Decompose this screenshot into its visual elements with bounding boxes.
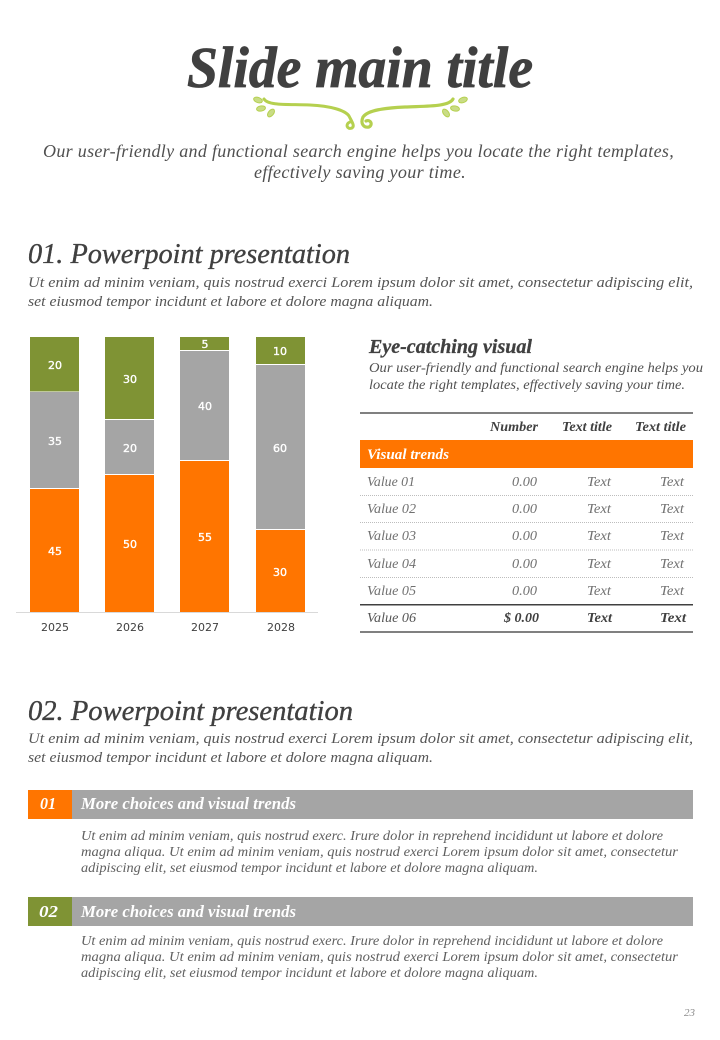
stacked bar chart bbox=[16, 337, 318, 634]
bar 2028 bbox=[256, 337, 305, 612]
section 02 paragraph: set eiusmod tempor incidunt et labore et dolore magna aliquam. bbox=[28, 750, 433, 766]
subtitle bbox=[43, 141, 674, 182]
row value 05: Value 05 bbox=[367, 584, 416, 599]
bar 2026: 50 bbox=[123, 538, 137, 551]
data table bbox=[360, 412, 693, 633]
bar 2028: 30 bbox=[273, 566, 287, 579]
row value 04 bbox=[367, 557, 685, 572]
item 01 header bar: 01 bbox=[40, 794, 56, 813]
row value 06 total bbox=[367, 611, 687, 626]
item 02 header bar: More choices and visual trends bbox=[80, 902, 296, 921]
row value 04: Text bbox=[587, 557, 612, 572]
item 02 header bar bbox=[28, 897, 693, 926]
row value 03: Text bbox=[587, 529, 612, 544]
item 01 text bbox=[81, 829, 679, 876]
bar 2028: 10 bbox=[273, 345, 287, 358]
table header row bbox=[489, 420, 686, 435]
bar 2025: 45 bbox=[48, 545, 62, 558]
axis labels: 2027 bbox=[191, 621, 219, 634]
section 01 paragraph: set eiusmod tempor incidunt et labore et dolore magna aliquam. bbox=[28, 294, 433, 310]
item 01 header bar bbox=[28, 790, 693, 819]
icon: green leaf flourish bbox=[253, 96, 468, 128]
section 02 paragraph bbox=[28, 731, 693, 766]
row value 01: Text bbox=[587, 475, 612, 490]
row value 06 total: Text bbox=[587, 611, 613, 626]
row value 01: 0.00 bbox=[512, 475, 537, 490]
item 01 text: Ut enim ad minim veniam, quis nostrud exerc. Irure dolor in reprehend incididunt ut labore et dolore bbox=[81, 829, 663, 844]
table heading: Eye-catching visual bbox=[368, 336, 532, 358]
row value 04: Text bbox=[660, 557, 685, 572]
row value 01: Value 01 bbox=[367, 475, 415, 490]
section 02 paragraph: Ut enim ad minim veniam, quis nostrud exerci Lorem ipsum dolor sit amet, consectetur adipiscing elit, bbox=[28, 731, 693, 747]
axis labels: 2025 bbox=[41, 621, 69, 634]
table header row: Text title bbox=[635, 420, 686, 435]
row value 02 bbox=[367, 502, 685, 517]
bar 2026: 30 bbox=[123, 373, 137, 386]
item 02 header bar: 02 bbox=[39, 902, 59, 921]
bar 2025: 35 bbox=[48, 435, 62, 448]
row value 03: 0.00 bbox=[512, 529, 537, 544]
item 01 header bar: More choices and visual trends bbox=[80, 794, 296, 813]
bar 2028: 60 bbox=[273, 442, 287, 455]
section 02 heading: 02. Powerpoint presentation bbox=[28, 696, 353, 727]
table description: Our user-friendly and functional search engine helps you bbox=[369, 360, 703, 375]
item 01 text: magna aliqua. Ut enim ad minim veniam, quis nostrud exerci Lorem ipsum dolor sit amet, consectetur bbox=[81, 845, 679, 860]
section 01 paragraph bbox=[28, 275, 693, 310]
bar 2027 bbox=[180, 337, 229, 612]
table header row: Number bbox=[489, 420, 539, 435]
row value 02: Value 02 bbox=[367, 502, 416, 517]
bar 2027: 40 bbox=[198, 400, 212, 413]
bar 2027: 5 bbox=[202, 338, 208, 351]
section 01 paragraph: Ut enim ad minim veniam, quis nostrud exerci Lorem ipsum dolor sit amet, consectetur adipiscing elit, bbox=[28, 275, 693, 291]
orange band: visual trends: Visual trends bbox=[367, 447, 449, 463]
item 02 text: adipiscing elit, set eiusmod tempor incidunt et labore et dolore magna aliquam. bbox=[81, 966, 538, 981]
row value 06 total: Value 06 bbox=[367, 611, 416, 626]
bar 2025 bbox=[30, 337, 79, 612]
item 01 text: adipiscing elit, set eiusmod tempor incidunt et labore et dolore magna aliquam. bbox=[81, 861, 538, 876]
row value 05: 0.00 bbox=[512, 584, 537, 599]
row value 04: Value 04 bbox=[367, 557, 416, 572]
item 02 text: Ut enim ad minim veniam, quis nostrud exerc. Irure dolor in reprehend incididunt ut labore et dolore bbox=[81, 934, 663, 949]
row value 05 bbox=[367, 584, 685, 599]
row value 01 bbox=[367, 475, 685, 490]
row value 03: Value 03 bbox=[367, 529, 416, 544]
row value 01: Text bbox=[660, 475, 685, 490]
row value 06 total: Text bbox=[660, 611, 687, 626]
orange band: visual trends bbox=[360, 440, 693, 468]
row value 04: 0.00 bbox=[512, 557, 537, 572]
row value 02: Text bbox=[587, 502, 612, 517]
row value 03 bbox=[367, 529, 685, 544]
row value 05: Text bbox=[660, 584, 685, 599]
bar 2027: 55 bbox=[198, 531, 212, 544]
item 02 text: magna aliqua. Ut enim ad minim veniam, quis nostrud exerci Lorem ipsum dolor sit amet, consectetur bbox=[81, 950, 679, 965]
table description: locate the right templates, effectively saving your time. bbox=[369, 377, 685, 392]
table header row: Text title bbox=[562, 420, 612, 435]
row value 05: Text bbox=[587, 584, 612, 599]
row value 03: Text bbox=[660, 529, 685, 544]
title: Slide main title bbox=[187, 35, 533, 100]
row value 02: Text bbox=[660, 502, 685, 517]
row value 06 total: $ 0.00 bbox=[503, 611, 539, 626]
bar 2026: 20 bbox=[123, 442, 137, 455]
table description bbox=[369, 360, 703, 392]
item 02 text bbox=[81, 934, 679, 981]
axis labels: 2026 bbox=[116, 621, 144, 634]
page number: 23 bbox=[684, 1007, 696, 1019]
bar 2025: 20 bbox=[48, 359, 62, 372]
section 01 heading: 01. Powerpoint presentation bbox=[28, 239, 350, 270]
row value 02: 0.00 bbox=[512, 502, 537, 517]
axis labels: 2028 bbox=[267, 621, 295, 634]
bar 2026 bbox=[105, 337, 154, 612]
axis labels bbox=[41, 621, 295, 634]
subtitle: Our user-friendly and functional search engine helps you locate the right templates, bbox=[43, 141, 674, 161]
subtitle: effectively saving your time. bbox=[254, 162, 466, 182]
